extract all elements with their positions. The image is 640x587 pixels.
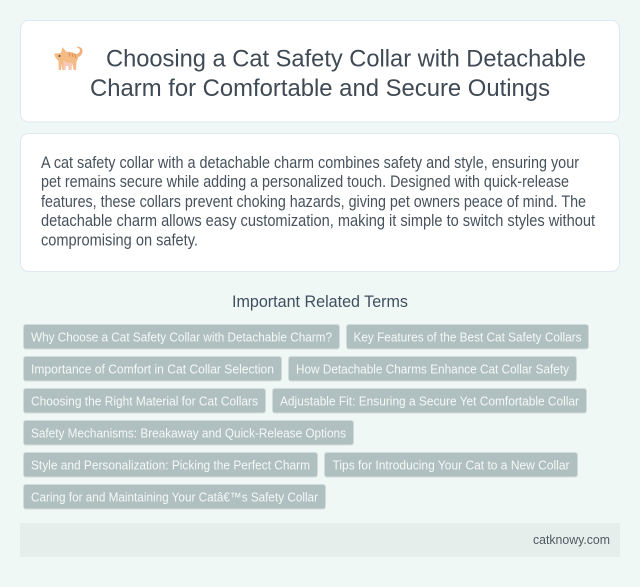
panel: description bbox=[20, 134, 620, 272]
tag: style: Style and Personalization: Picking the Perfect Charm bbox=[31, 458, 310, 472]
tag: comfort: Importance of Comfort in Cat Collar Selection bbox=[31, 362, 274, 376]
tag: adjustable fit: Adjustable Fit: Ensuring a Secure Yet Comfortable Collar bbox=[280, 394, 579, 408]
icon: cat bbox=[54, 46, 83, 70]
tag: tips: Tips for Introducing Your Cat to a New Collar bbox=[332, 458, 570, 472]
tag: caring bbox=[24, 484, 326, 509]
text block: description: compromising on safety. bbox=[41, 232, 198, 250]
text block: description bbox=[41, 154, 595, 250]
heading: Choosing a Cat Safety Collar with Detachable bbox=[106, 46, 586, 72]
tag: safety mechanisms bbox=[24, 420, 354, 445]
heading: Charm for Comfortable and Secure Outings bbox=[90, 75, 550, 102]
heading bbox=[90, 46, 586, 102]
heading: important related terms: Important Related Terms bbox=[232, 293, 408, 311]
tag: caring: Caring for and Maintaining Your Catâ€™s Safety Collar bbox=[31, 490, 318, 504]
footer: catknowy.com bbox=[533, 532, 610, 547]
text block: description: pet remains secure while adding a personalized touch. Designed with quick-release bbox=[41, 173, 569, 191]
tag: key features: Key Features of the Best Cat Safety Collars bbox=[354, 330, 582, 344]
tag: style bbox=[24, 452, 318, 477]
tag list bbox=[24, 324, 588, 509]
tag: why choose: Why Choose a Cat Safety Collar with Detachable Charm? bbox=[31, 330, 332, 344]
tag: key features bbox=[346, 324, 588, 349]
tag: adjustable fit bbox=[272, 388, 586, 413]
tag: comfort bbox=[24, 356, 282, 381]
tag: detachable charms: How Detachable Charms Enhance Cat Collar Safety bbox=[296, 362, 570, 376]
tag: safety mechanisms: Safety Mechanisms: Breakaway and Quick-Release Options bbox=[31, 426, 346, 440]
panel: title card bbox=[20, 20, 620, 122]
tag: material: Choosing the Right Material for Cat Collars bbox=[31, 394, 258, 408]
footer bbox=[20, 523, 620, 557]
text block: description: A cat safety collar with a detachable charm combines safety and style, ensuring your bbox=[41, 154, 579, 172]
tag: why choose bbox=[24, 324, 340, 349]
tag: detachable charms bbox=[288, 356, 576, 381]
tag: tips bbox=[324, 452, 578, 477]
tag: material bbox=[24, 388, 266, 413]
